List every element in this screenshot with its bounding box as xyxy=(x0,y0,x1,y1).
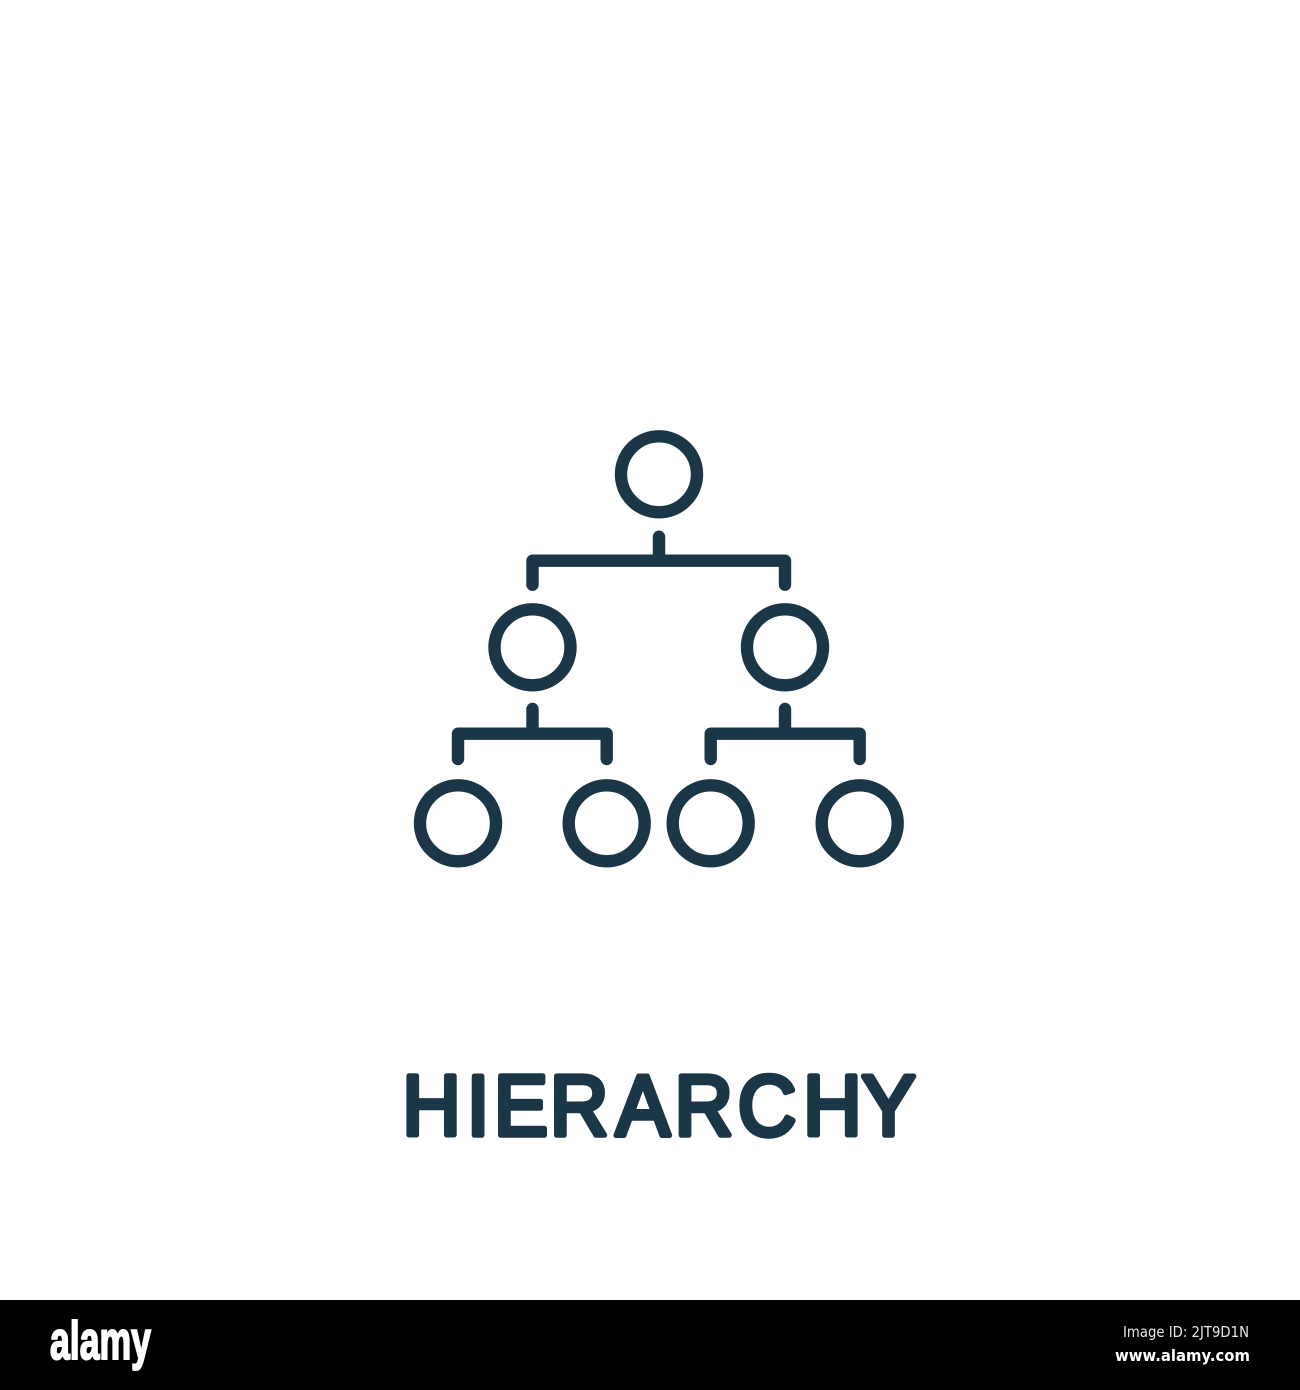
connector: left branch xyxy=(458,709,607,759)
bottom node 2 xyxy=(569,785,645,861)
title: HIERARCHY xyxy=(402,1058,916,1153)
bottom node 4 xyxy=(822,785,898,861)
footer bar xyxy=(0,1300,1300,1390)
icon: hierarchy tree xyxy=(420,436,898,861)
bottom node 3 xyxy=(673,785,749,861)
connector: right branch xyxy=(711,709,860,759)
logo: alamy: alamy xyxy=(50,1311,151,1371)
left middle node xyxy=(494,609,570,685)
image id: Image ID: 2JT9D1N xyxy=(1123,1323,1249,1341)
right middle node xyxy=(747,609,823,685)
website: www.alamy.com xyxy=(1115,1346,1250,1365)
connector: top level xyxy=(532,537,785,585)
bottom node 1 xyxy=(420,785,496,861)
top node xyxy=(621,436,697,512)
